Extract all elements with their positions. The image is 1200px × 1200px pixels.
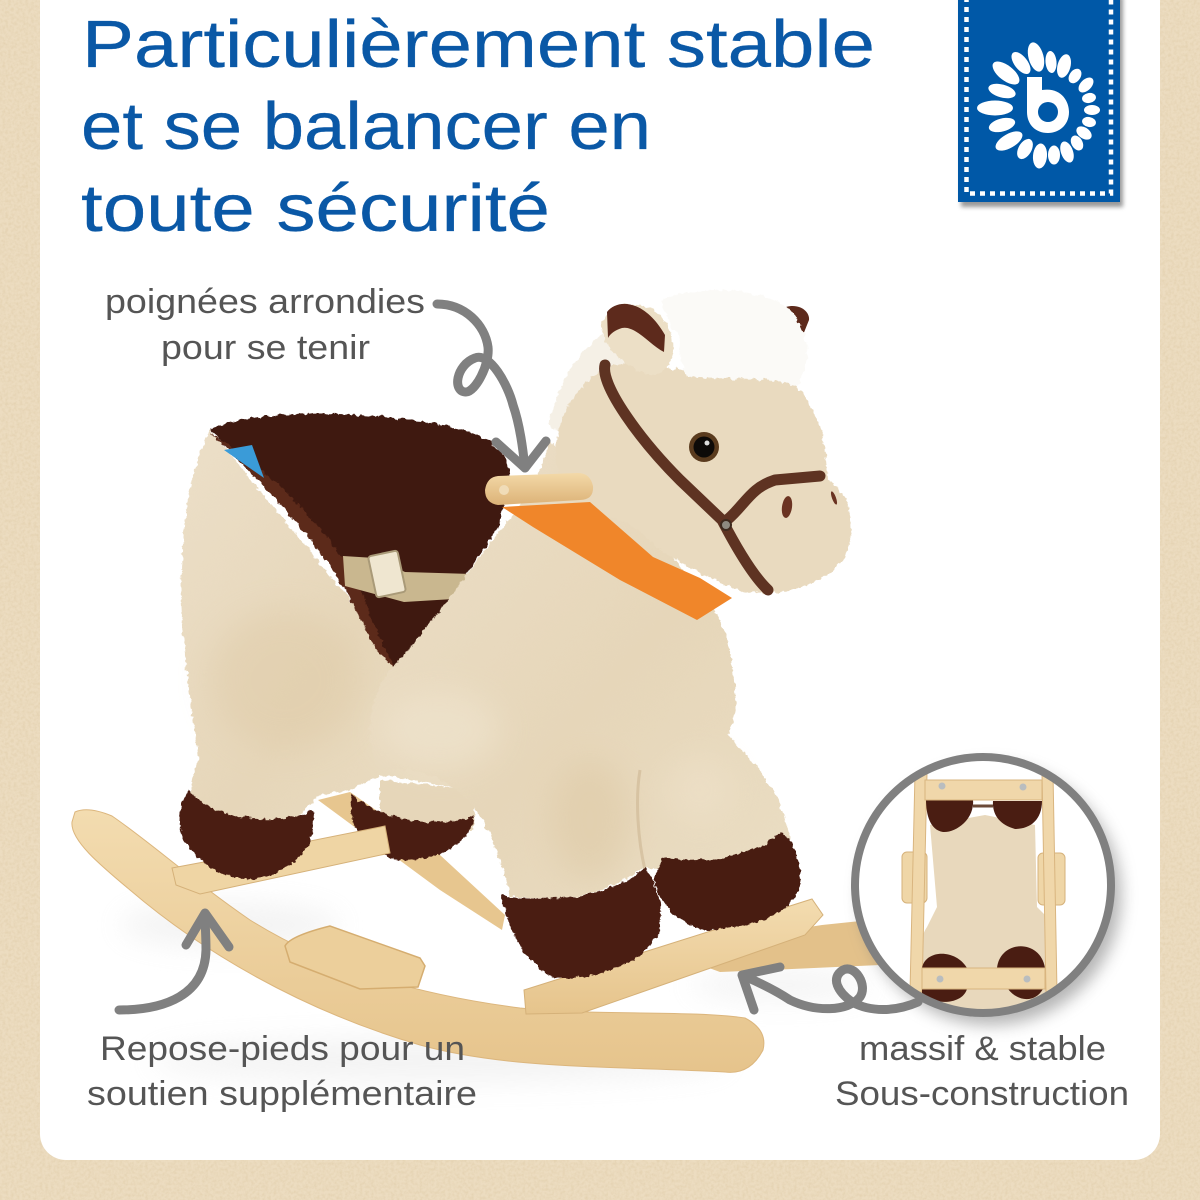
right ear xyxy=(786,306,809,335)
handle xyxy=(485,473,593,505)
label: sub-construction: Sous-construction xyxy=(835,1075,1129,1113)
seat rim highlight xyxy=(210,432,395,668)
seat outer body xyxy=(181,430,470,836)
label: handles xyxy=(105,283,425,367)
rear hoof far xyxy=(351,795,474,860)
label: footrest: Repose-pieds pour un xyxy=(100,1030,465,1068)
head xyxy=(556,363,851,593)
arrow: to handle xyxy=(437,304,546,468)
left ear xyxy=(602,304,673,375)
title: toute sécurité xyxy=(81,171,550,246)
body shading xyxy=(380,690,735,880)
label: sub-construction xyxy=(835,1030,1129,1113)
orange bandana xyxy=(502,502,732,620)
inset: plush underside xyxy=(919,815,1056,1010)
blue tag xyxy=(224,445,264,478)
inset: rails xyxy=(910,773,1057,992)
rear leg far xyxy=(380,780,475,830)
inset circle: underside view xyxy=(855,757,1121,1025)
rocking horse illustration xyxy=(72,290,880,1072)
title: Particulièrement stable xyxy=(82,7,875,82)
leg seam xyxy=(638,770,645,870)
safety strap xyxy=(343,550,472,602)
label: sub-construction: massif & stable xyxy=(859,1030,1106,1068)
eye xyxy=(689,432,719,462)
floor shadow xyxy=(120,903,870,1082)
inset: side handles xyxy=(902,852,1065,905)
label: footrest xyxy=(87,1030,477,1113)
mane xyxy=(548,330,640,440)
hoof front left xyxy=(502,868,661,978)
seat dark interior xyxy=(210,414,509,668)
bridle xyxy=(605,365,820,590)
inset: strap between front hooves xyxy=(973,804,993,808)
inset: hooves xyxy=(922,799,1045,1002)
label: footrest: soutien supplémentaire xyxy=(87,1075,477,1113)
arrow: to footrest xyxy=(119,913,229,1010)
bridle rivet xyxy=(721,520,731,530)
arrow: from inset to base xyxy=(742,967,918,1010)
seat fur shading xyxy=(210,610,360,750)
nostrils xyxy=(781,491,838,519)
inset: bolts xyxy=(936,782,1030,982)
wooden crossbar left xyxy=(172,826,390,894)
inset: cross bars xyxy=(922,780,1045,989)
rear rocker xyxy=(318,792,880,972)
rear hoof near xyxy=(179,790,314,879)
front rocker xyxy=(72,810,764,1072)
white forelock xyxy=(662,290,807,387)
label: handles: poignées arrondies xyxy=(105,283,425,321)
main body, neck and front legs xyxy=(370,440,790,899)
label: handles: pour se tenir xyxy=(161,329,370,367)
title: et se balancer en xyxy=(81,89,651,164)
footrest xyxy=(285,926,425,989)
title xyxy=(81,7,875,246)
hoof front right xyxy=(654,832,800,930)
icon: brand logo tag xyxy=(958,0,1123,207)
wooden crossbar right xyxy=(524,899,823,1014)
